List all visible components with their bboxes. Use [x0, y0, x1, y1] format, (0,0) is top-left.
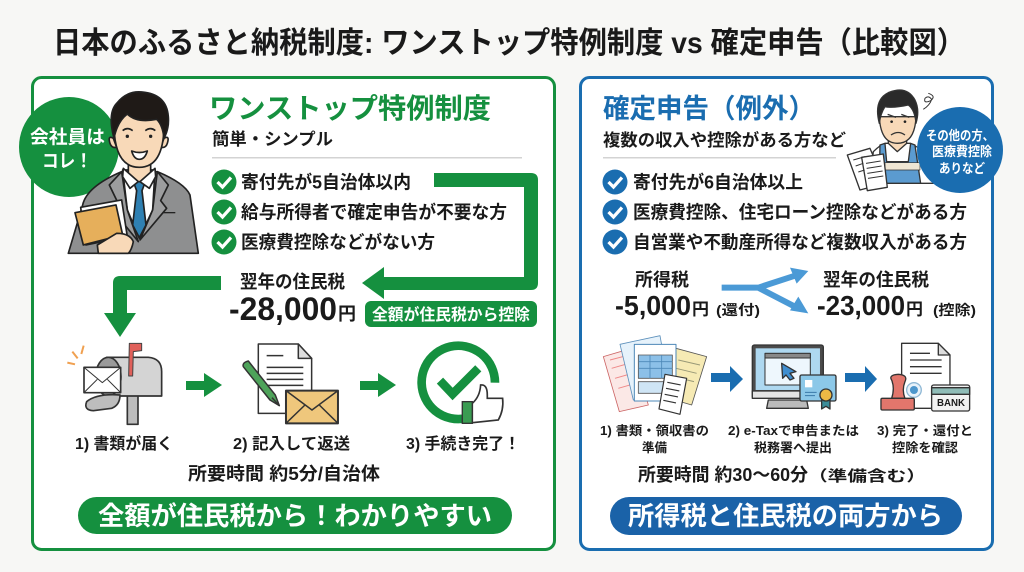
arrow: resident tax to mailbox	[104, 276, 221, 337]
text: resident tax amount: 円	[906, 300, 923, 319]
arrow: split to two taxes	[722, 268, 808, 313]
check item 1	[602, 170, 803, 194]
badge: full deduction	[365, 301, 537, 327]
step labels: 1) 書類が届く	[75, 434, 173, 453]
icon: completed check with thumbs up	[422, 346, 503, 423]
check item 3	[212, 230, 435, 254]
icon: document, pen and envelope	[243, 344, 338, 423]
heading: tax return: 確定申告（例外）	[603, 94, 815, 124]
step labels	[600, 423, 973, 455]
panel: tax return	[580, 78, 1003, 550]
text: income tax amount: 円	[692, 300, 709, 319]
step labels: 3) 完了・還付と	[877, 423, 973, 438]
step labels: 3) 手続き完了！	[406, 434, 520, 453]
check item 1: 寄付先が5自治体以内	[241, 172, 411, 192]
icon: documents and receipts	[603, 336, 707, 414]
text: resident tax amount: (控除)	[933, 302, 976, 318]
heading: one-stop: ワンストップ特例制度	[209, 93, 491, 124]
text: income tax amount: 所得税	[635, 270, 689, 290]
subheading: simple: 簡単・シンプル	[212, 129, 333, 149]
text: time required: 所要時間 約30〜60分	[638, 465, 808, 485]
step labels: 1) 書類・領収書の	[600, 423, 709, 438]
pill: summary: 全額が住民税から！わかりやすい	[98, 501, 492, 531]
check item 3: 医療費控除などがない方	[241, 232, 435, 252]
text: time required: （準備含む）	[808, 467, 926, 485]
badge: other cases: ありなど	[939, 161, 985, 176]
icon: stamp, document and bank card	[881, 343, 970, 411]
text: resident tax amount	[229, 271, 356, 327]
icon: computer e-Tax	[752, 345, 836, 409]
text: resident tax amount: 翌年の住民税	[823, 269, 929, 290]
step labels	[75, 434, 520, 453]
arrow: conditions to resident tax	[362, 173, 538, 299]
badge: other cases	[917, 107, 1003, 193]
badge: company employee	[19, 97, 119, 197]
badge: company employee: コレ！	[42, 150, 92, 172]
check item 1: 寄付先が6自治体以上	[633, 172, 803, 192]
arrow: blue step 2 to 3	[845, 366, 877, 392]
text: resident tax amount	[817, 269, 976, 321]
text: resident tax amount: -28,000	[229, 291, 337, 327]
text: income tax amount	[615, 270, 760, 321]
text: time required	[638, 465, 926, 485]
arrow: blue step 1 to 2	[711, 366, 743, 392]
subheading: multiple income: 複数の収入や控除がある方など	[603, 130, 846, 150]
check item 2: 医療費控除、住宅ローン控除などがある方	[633, 202, 967, 222]
step labels: 準備	[642, 440, 667, 455]
arrow: step 2 to 3	[360, 373, 396, 397]
check item 2: 給与所得者で確定申告が不要な方	[241, 202, 507, 222]
step labels: 控除を確認	[892, 440, 959, 455]
text: resident tax amount: 翌年の住民税	[240, 271, 345, 292]
arrow: step 1 to 2	[186, 373, 222, 397]
step labels: 2) 記入して返送	[233, 435, 350, 453]
text: time required: 所要時間 約5分/自治体	[188, 464, 380, 484]
badge: company employee: 会社員は	[30, 126, 105, 148]
text: income tax amount: (還付)	[716, 302, 760, 318]
badge: full deduction: 全額が住民税から控除	[372, 305, 530, 324]
list: tax return conditions	[602, 170, 967, 254]
pill: summary: 所得税と住民税の両方から	[628, 501, 943, 531]
text: income tax amount: -5,000	[615, 290, 691, 321]
label: bank: BANK	[937, 398, 966, 409]
badge: other cases: その他の方、	[926, 128, 994, 143]
badge: other cases: 医療費控除	[932, 144, 992, 159]
step labels: 税務署へ提出	[754, 440, 832, 455]
title: 日本のふるさと納税制度: ワンストップ特例制度 vs 確定申告（比較図）	[53, 27, 965, 60]
step labels: 2) e-Taxで申告または	[728, 423, 860, 438]
text: resident tax amount: 円	[338, 304, 356, 324]
text: resident tax amount: -23,000	[817, 290, 905, 321]
icon: worried man with receipts	[847, 90, 933, 191]
icon: mailbox	[67, 343, 162, 424]
icon: smiling businessman	[68, 92, 198, 253]
list: one-stop conditions	[212, 170, 507, 254]
pill: summary	[610, 497, 962, 535]
panel: one-stop	[19, 78, 554, 550]
check item 1	[212, 170, 411, 194]
check item 3: 自営業や不動産所得など複数収入がある方	[633, 232, 967, 252]
